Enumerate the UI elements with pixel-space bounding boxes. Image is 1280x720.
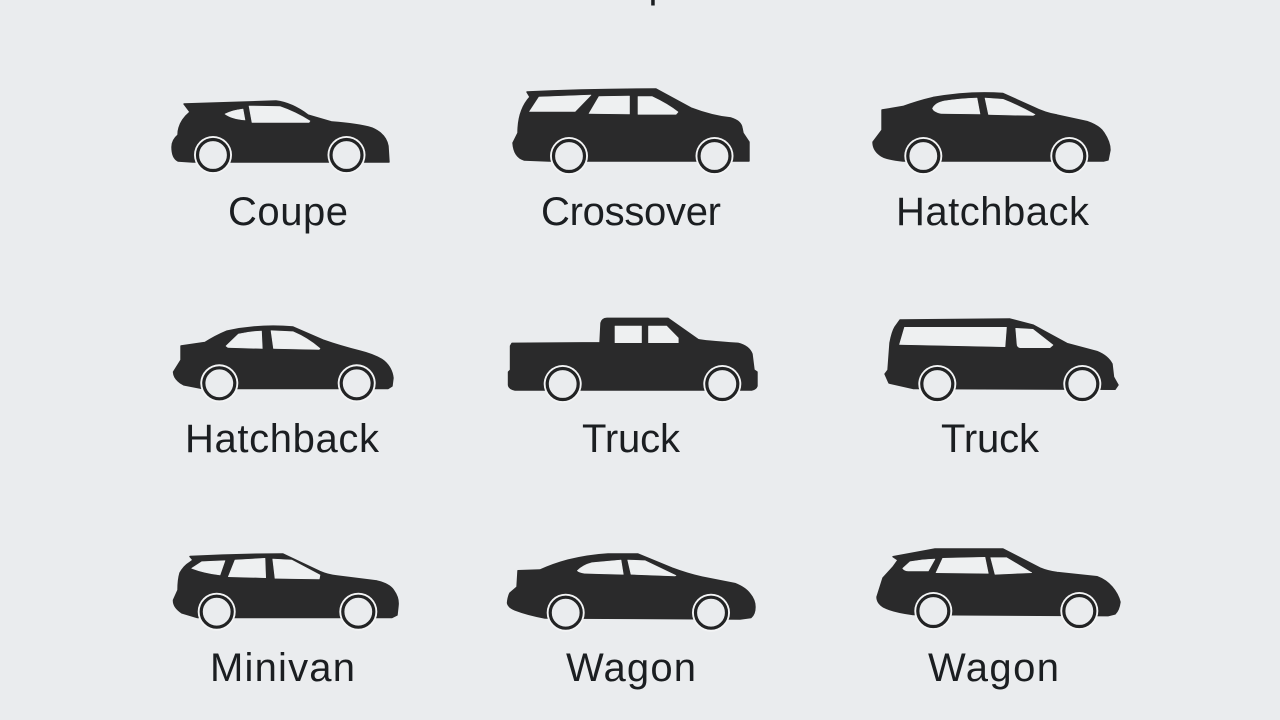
panel: minivan [173,554,398,690]
icon: hatchback silhouette [873,93,1110,175]
panel: wagon middle [508,554,755,690]
label: Wagon: Wagon [566,646,696,690]
label: Hatchback: Hatchback [896,190,1090,234]
icon: minivan silhouette [173,554,398,631]
panel: van labelled truck [885,319,1118,461]
label: Coupe: Coupe [228,190,348,234]
label: Truck: Truck [941,417,1040,461]
label: Wagon: Wagon [928,646,1059,690]
icon: coupe silhouette [172,101,389,174]
panel: pickup truck [508,318,757,461]
icon: wagon silhouette [877,549,1120,630]
icon: sedan silhouette [174,326,393,402]
label: Minivan: Minivan [210,646,355,690]
panel: hatchback middle [174,326,393,461]
icon: low sedan silhouette [508,554,755,632]
icon: crossover silhouette [513,89,749,175]
panel: hatchback top [873,93,1110,234]
icon: van silhouette [885,319,1118,403]
label: Crossover: Crossover [541,190,721,234]
panel: coupe [172,101,389,234]
panel: crossover [513,89,749,234]
label: Truck: Truck [582,417,681,461]
panel: wagon right [877,549,1120,690]
label: Hatchback: Hatchback [185,417,380,461]
icon: pickup silhouette [508,318,757,403]
